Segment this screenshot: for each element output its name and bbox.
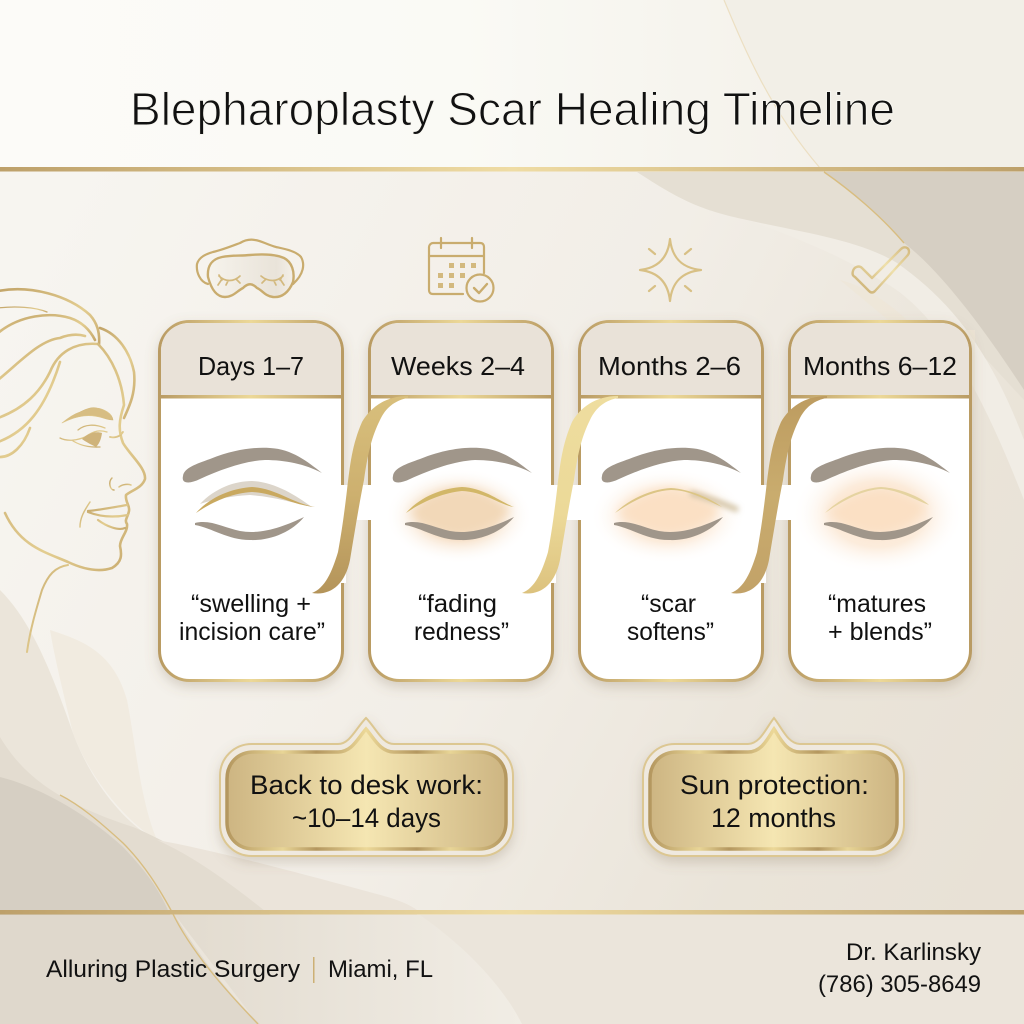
footer: doctor contact: Dr. Karlinsky (846, 939, 981, 966)
ribbon connector 1 (312, 396, 408, 593)
callout text (680, 770, 869, 833)
callout: sun protection (643, 718, 904, 856)
card 4 eye: matured scar (792, 448, 964, 574)
footer: practice and location (46, 956, 433, 983)
card 2 caption: “fading (418, 590, 497, 618)
card 3: Months 2–6 (580, 322, 762, 680)
card 4 caption (828, 590, 932, 646)
ribbon connector 2 (522, 396, 618, 593)
card 4 heading: Months 6–12 (803, 351, 957, 381)
card 4 header (791, 323, 969, 395)
callout text (250, 770, 483, 833)
footer: doctor contact (818, 939, 981, 998)
title: Blepharoplasty Scar Healing Timeline (130, 83, 895, 135)
card 3 caption: softens” (627, 618, 714, 646)
callout plate (227, 729, 506, 849)
callout plate (650, 729, 897, 849)
card 3 caption (627, 590, 714, 646)
card 1 caption: incision care” (179, 618, 325, 646)
white bands between cards (339, 485, 792, 583)
card 1 eye: swollen lid with incision (183, 448, 322, 540)
card 2 eye: fading redness (385, 448, 533, 564)
card 1 header (161, 323, 341, 395)
callout text: Back to desk work: (250, 770, 483, 800)
callout: desk work (220, 718, 513, 856)
card 2 heading: Weeks 2–4 (391, 351, 525, 381)
footer: practice and location: Miami, FL (328, 956, 433, 983)
icon: sparkle (640, 239, 701, 301)
card 3 caption: “scar (641, 590, 696, 618)
callout text: ~10–14 days (292, 803, 441, 833)
card 4 caption: “matures (828, 590, 926, 618)
card 1 caption: “swelling + (191, 590, 311, 618)
icon: check mark (853, 247, 909, 292)
card 3 header (581, 323, 761, 395)
card 2: Weeks 2–4 (370, 322, 552, 680)
ribbon connector 3 (731, 396, 827, 593)
icon: sleep mask (197, 240, 303, 297)
card 3 heading: Months 2–6 (598, 351, 741, 381)
callout text: 12 months (711, 803, 836, 833)
card 1 caption (179, 590, 325, 646)
card 1 heading: Days 1–7 (198, 351, 304, 381)
card 2 caption: redness” (414, 618, 509, 646)
callout text: Sun protection: (680, 770, 869, 800)
card 1: Days 1–7 (160, 322, 342, 680)
icon: calendar (429, 238, 494, 302)
card 2 header (371, 323, 551, 395)
footer: practice and location: Alluring Plastic Surgery (46, 956, 300, 983)
footer divider line (0, 910, 1024, 914)
card 4: Months 6–12 (790, 322, 970, 680)
card 2 caption (414, 590, 509, 646)
card 3 eye: scar softens (590, 448, 746, 564)
footer: doctor contact: (786) 305-8649 (818, 971, 981, 998)
card 4 caption: + blends” (828, 618, 932, 646)
illustration: woman face profile (0, 289, 145, 652)
header divider line (0, 167, 1024, 172)
